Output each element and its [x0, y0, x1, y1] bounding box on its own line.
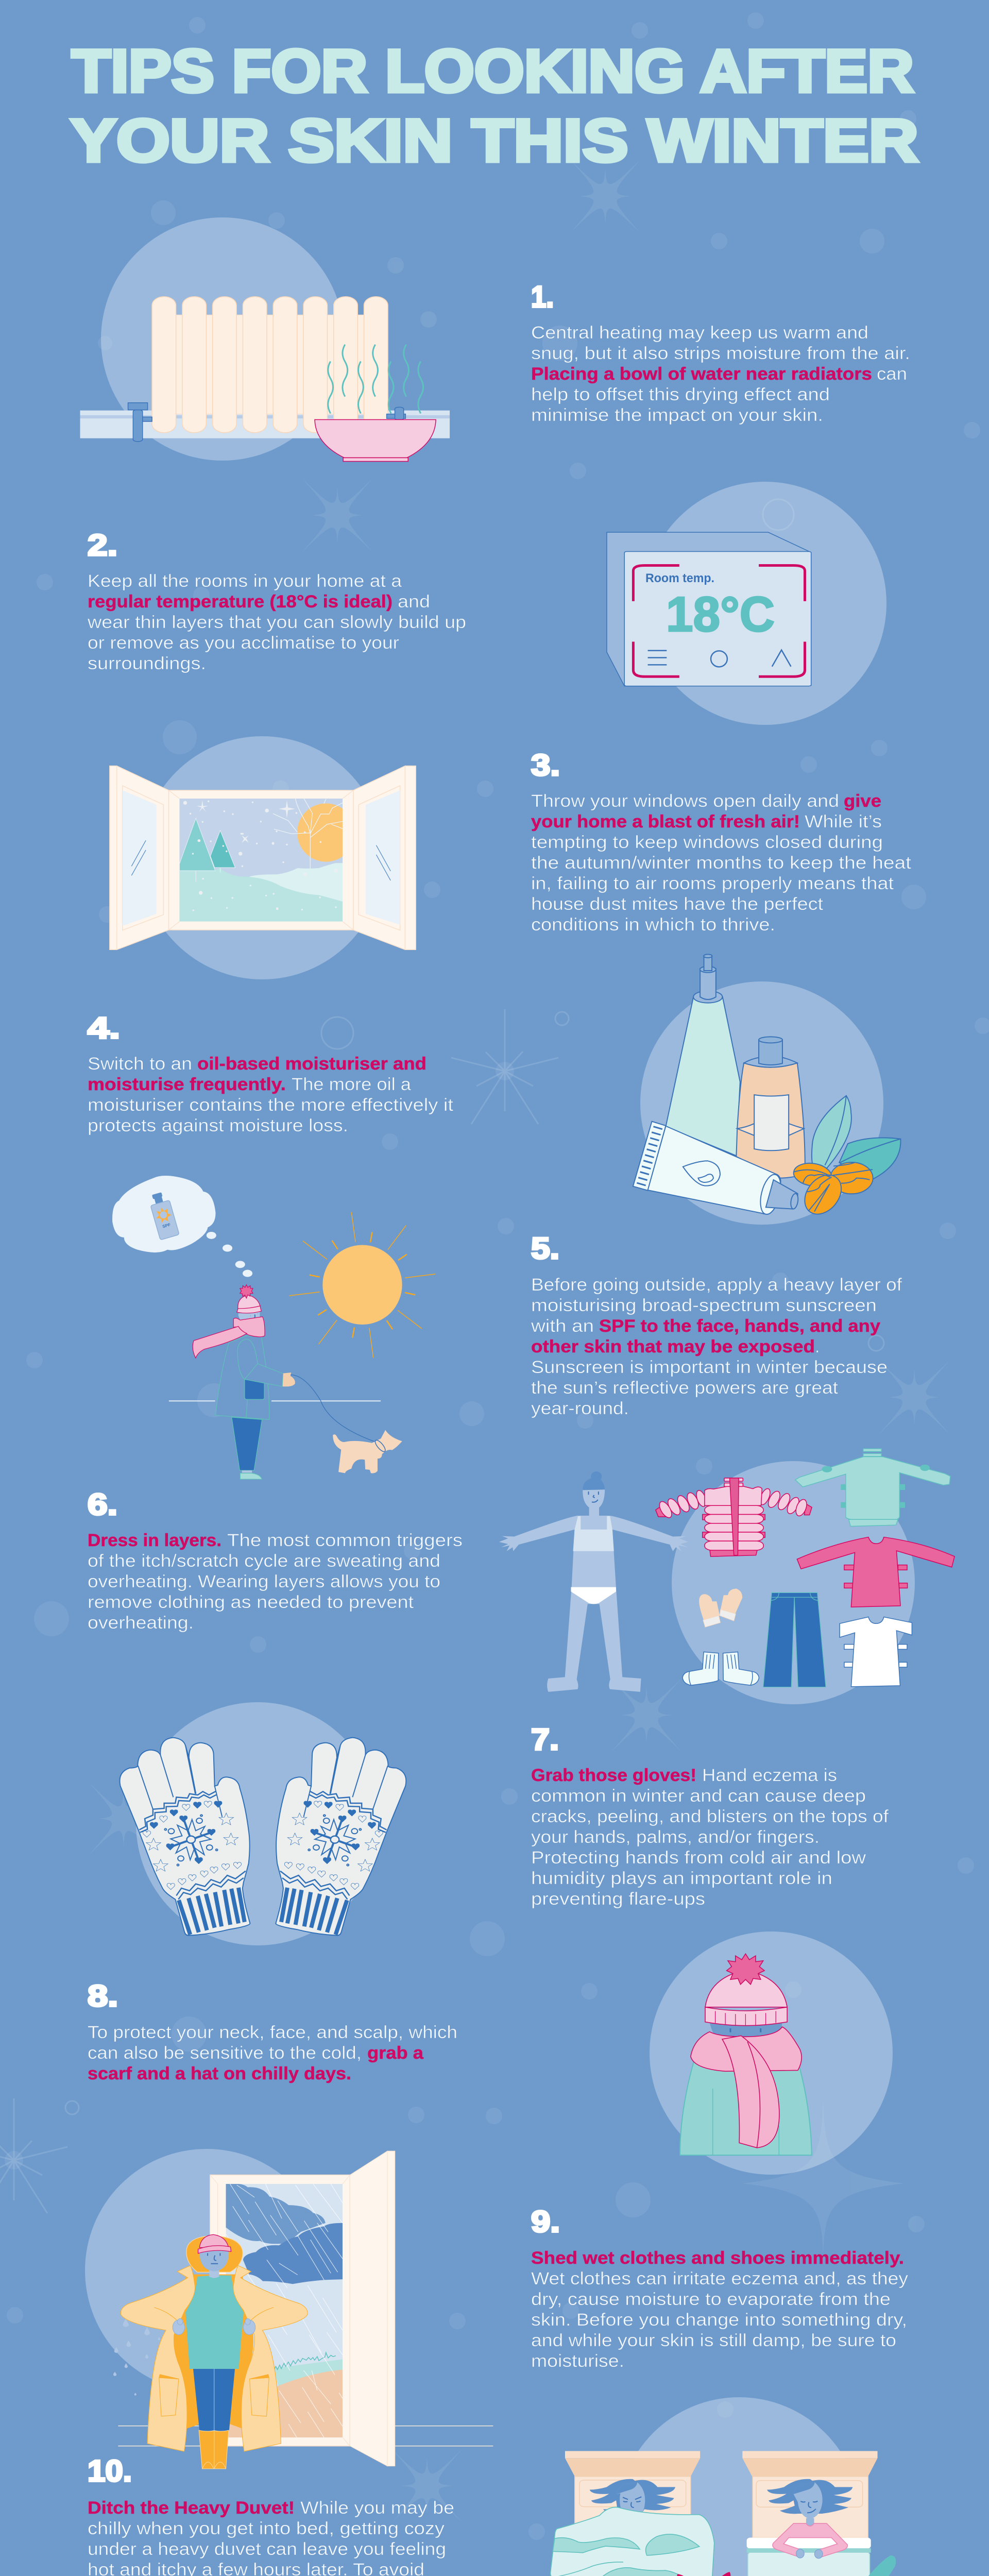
- dog: [333, 1430, 402, 1473]
- left glove: [120, 1738, 250, 1936]
- right bed with light duvet: [742, 2451, 878, 2576]
- tip 6 text: remove clothing as needed to prevent: [88, 1592, 414, 1612]
- tip 8 text: grab a: [367, 2043, 424, 2063]
- tip 4 text: oil-based moisturiser and: [197, 1054, 427, 1074]
- tip 8 text: scarf and a hat on chilly days.: [88, 2064, 351, 2083]
- thought bubble with SPF bottle: SPF: [162, 1222, 171, 1229]
- tip 3 text: Throw your windows open daily and: [531, 791, 839, 811]
- tip 10: [88, 2454, 456, 2576]
- leaves: [812, 1096, 900, 1180]
- icon: open window with winter scene: [110, 766, 416, 950]
- number 1: 1.: [531, 280, 554, 314]
- tip 7: [531, 1723, 889, 1909]
- thermostat temperature: 18°C: [666, 587, 775, 642]
- puffer jacket: [656, 1478, 812, 1556]
- door frame and rainy view: [210, 2151, 395, 2466]
- tip 1 text: snug, but it also strips moisture from the air.: [531, 344, 910, 363]
- tip 7 text: [531, 1766, 889, 1909]
- number 3: 3.: [531, 749, 560, 782]
- icon: radiator with bowl of water: [80, 297, 450, 461]
- tip 3 text: While it’s: [805, 812, 882, 832]
- nuts: [792, 1161, 873, 1220]
- tip 8 text: can also be sensitive to the cold,: [88, 2043, 362, 2063]
- tip 9 text: Wet clothes can irritate eczema and, as they: [531, 2269, 908, 2289]
- tip 6 text: overheating. Wearing layers allows you to: [88, 1572, 440, 1591]
- tip 3 text: conditions in which to thrive.: [531, 915, 775, 935]
- icon: person in hat and scarf: [680, 1954, 812, 2155]
- tip 1: [531, 280, 910, 425]
- person in open raincoat: [121, 2234, 308, 2469]
- tip 5 text: other skin that may be exposed: [531, 1337, 815, 1357]
- sun: [289, 1212, 435, 1358]
- tip 7 text: preventing flare-ups: [531, 1889, 705, 1909]
- tip 4 text: protects against moisture loss.: [88, 1116, 348, 1136]
- tip 3 text: in, failing to air rooms properly means that: [531, 874, 894, 893]
- tip 10 text: Ditch the Heavy Duvet!: [88, 2498, 295, 2518]
- tall bottle: [666, 954, 740, 1156]
- right glove: [276, 1738, 406, 1936]
- winter scene: [179, 799, 355, 922]
- tip 3: [531, 749, 912, 935]
- number 2: 2.: [88, 529, 117, 562]
- left window sash: [110, 766, 169, 950]
- tip 7 text: Protecting hands from cold air and low: [531, 1848, 866, 1868]
- tip 9 text: skin. Before you change into something dry,: [531, 2310, 907, 2330]
- tip 9 text: [531, 2248, 908, 2371]
- thermostat label: Room temp.: [645, 571, 714, 585]
- mittens: [699, 1588, 742, 1627]
- tip 1 text: [531, 323, 910, 425]
- tip 8 text: [88, 2023, 457, 2083]
- tip 4: [88, 1011, 454, 1136]
- tip 4 text: The more oil a: [292, 1075, 411, 1094]
- floor lines: [118, 2426, 493, 2446]
- tip 9: [531, 2205, 908, 2371]
- tip 5 text: with an: [531, 1316, 594, 1336]
- tip 5 text: .: [815, 1337, 820, 1357]
- tip 3 text: house dust mites have the perfect: [531, 894, 824, 914]
- tip 7 text: Grab those gloves!: [531, 1766, 696, 1785]
- dog lead: [291, 1375, 376, 1442]
- icon: beds with heavy and light duvets: [549, 2451, 896, 2576]
- tip 2: [87, 529, 466, 673]
- tip 9 text: and while your skin is still damp, be sure to: [531, 2331, 896, 2350]
- tip 10 text: While you may be: [300, 2498, 454, 2518]
- person in winter coat: [193, 1285, 295, 1479]
- tip 2 text: surroundings.: [88, 654, 206, 673]
- tip 2 text: [87, 571, 466, 673]
- tip 2 text: Keep all the rooms in your home at a: [88, 571, 402, 591]
- tip 5 text: year-round.: [531, 1399, 629, 1418]
- tip 9 text: dry, cause moisture to evaporate from the: [531, 2290, 891, 2309]
- tip 3 text: your home a blast of fresh air!: [531, 812, 800, 832]
- number 5: 5.: [531, 1232, 559, 1265]
- tip 3 text: give: [844, 791, 881, 811]
- tip 3 text: [531, 791, 912, 935]
- tip 9 text: Shed wet clothes and shoes immediately.: [531, 2248, 904, 2268]
- window frame: [169, 790, 353, 930]
- tip 7 text: your hands, palms, and/or fingers.: [531, 1827, 820, 1847]
- tip 4 text: [88, 1054, 454, 1136]
- tip 2 text: wear thin layers that you can slowly build up: [87, 613, 466, 632]
- tip 6 text: [88, 1531, 463, 1633]
- tip 2 text: or remove as you acclimatise to your: [88, 633, 399, 653]
- tip 7 text: Hand eczema is: [702, 1766, 837, 1785]
- title: TIPS FOR LOOKING AFTER: [72, 37, 914, 105]
- tip 5 text: [531, 1275, 902, 1418]
- title: [71, 37, 918, 174]
- tip 5 text: Before going outside, apply a heavy layer of: [531, 1275, 902, 1295]
- tip 10 text: [88, 2498, 456, 2576]
- tip 4 text: moisturise frequently.: [88, 1075, 286, 1094]
- tip 9 text: moisturise.: [531, 2351, 624, 2371]
- icon: person in raincoat at open door: [113, 2151, 493, 2469]
- icon: figure and layers of clothing: [499, 1449, 954, 1692]
- socks: [683, 1652, 759, 1685]
- tip 1 text: help to offset this drying effect and: [531, 385, 830, 404]
- tip 7 text: common in winter and can cause deep: [531, 1786, 866, 1806]
- tip 4 text: moisturiser contains the more effectively it: [88, 1095, 454, 1115]
- tip 5 text: moisturising broad-spectrum sunscreen: [531, 1296, 877, 1315]
- tip 7 text: cracks, peeling, and blisters on the tops of: [531, 1807, 889, 1826]
- icon: room thermostat: [607, 532, 811, 686]
- icon: cross: [675, 2572, 734, 2576]
- tip 5 text: the sun’s reflective powers are great: [531, 1378, 839, 1398]
- tip 10 text: chilly when you get into bed, getting cozy: [88, 2519, 445, 2538]
- icon: tick: [805, 2555, 896, 2576]
- right window sash: [353, 766, 416, 950]
- tip 10 text: under a heavy duvet can leave you feeling: [88, 2539, 446, 2559]
- tip 3 text: tempting to keep windows closed during: [531, 833, 883, 852]
- tip 8: [88, 1979, 457, 2083]
- title: YOUR SKIN THIS WINTER: [71, 107, 918, 174]
- tip 7 text: humidity plays an important role in: [531, 1869, 832, 1888]
- number 9: 9.: [531, 2205, 560, 2239]
- tip 3 text: the autumn/winter months to keep the heat: [531, 853, 912, 873]
- icon: patterned gloves: [120, 1738, 406, 1936]
- pink top: [797, 1537, 954, 1607]
- teal sweater: [795, 1449, 950, 1527]
- icon: person walking dog in the sun: [112, 1176, 435, 1479]
- tube: [633, 1122, 799, 1216]
- left bed with heavy duvet: [549, 2451, 714, 2576]
- orange bottle: [736, 1037, 805, 1178]
- thought bubble with SPF bottle: [112, 1176, 252, 1277]
- background circles: [85, 217, 915, 2576]
- number 8: 8.: [88, 1979, 118, 2013]
- tip 6 text: Dress in layers.: [88, 1531, 221, 1550]
- number 6: 6.: [88, 1488, 117, 1521]
- white t-shirt: [840, 1617, 912, 1687]
- tip 6 text: overheating.: [88, 1613, 194, 1633]
- tip 1 text: can: [877, 364, 907, 384]
- number 10: 10.: [88, 2454, 132, 2488]
- tip 6 text: The most common triggers: [227, 1531, 463, 1550]
- tip 1 text: Central heating may keep us warm and: [531, 323, 868, 343]
- tip 5 text: SPF to the face, hands, and any: [599, 1316, 880, 1336]
- tip 2 text: and: [398, 592, 430, 612]
- figure: [499, 1471, 688, 1692]
- icon: moisturiser bottles and tube: [633, 954, 900, 1220]
- tip 5: [531, 1232, 902, 1418]
- number 4: 4.: [88, 1011, 120, 1045]
- tip 2 text: regular temperature (18°C is ideal): [88, 592, 393, 612]
- jeans: [763, 1592, 826, 1687]
- tip 6: [88, 1488, 463, 1633]
- tip 4 text: Switch to an: [88, 1054, 192, 1074]
- number 7: 7.: [531, 1723, 559, 1756]
- tip 8 text: To protect your neck, face, and scalp, which: [88, 2023, 457, 2042]
- tip 5 text: Sunscreen is important in winter because: [531, 1358, 888, 1377]
- tip 6 text: of the itch/scratch cycle are sweating and: [88, 1551, 440, 1571]
- tip 1 text: Placing a bowl of water near radiators: [531, 364, 872, 384]
- tip 1 text: minimise the impact on your skin.: [531, 405, 823, 425]
- raindrops: [113, 2318, 160, 2396]
